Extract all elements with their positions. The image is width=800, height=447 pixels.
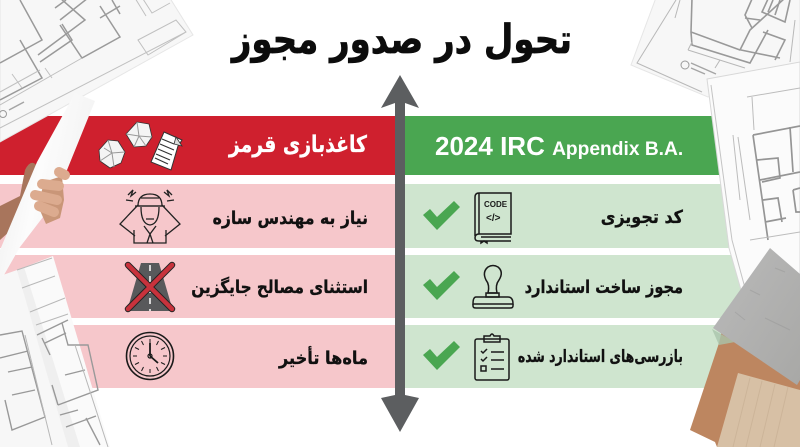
center double arrow xyxy=(381,75,419,432)
title: تحول در صدور مجوز xyxy=(230,16,572,63)
blueprint sheet right xyxy=(707,62,800,320)
icon: crossed road xyxy=(127,263,173,311)
icon: code book: </> xyxy=(486,213,501,224)
icon: checklist clipboard xyxy=(475,334,509,380)
right row 2 label: مجوز ساخت استاندارد xyxy=(525,277,683,297)
rolled blueprint bottom left xyxy=(0,256,110,447)
hand back and thumb xyxy=(0,163,38,240)
icon: green check 2 xyxy=(423,271,460,300)
right row backgrounds xyxy=(405,184,750,388)
icon: crumpled papers and document xyxy=(99,122,182,170)
left row backgrounds xyxy=(0,184,395,388)
icon: stressed engineer xyxy=(120,190,180,243)
paper roll xyxy=(0,93,95,282)
light wood sample xyxy=(717,373,800,447)
left row 2 label: استثنای مصالح جایگزین xyxy=(191,276,368,298)
right row 3 label: بازرسی‌های استاندارد شده xyxy=(518,346,683,367)
blueprint sheet top right xyxy=(631,0,800,97)
right row 1 label: کد تجویزی xyxy=(601,207,683,228)
left header bar xyxy=(0,116,395,175)
left panel: red paperwork rows xyxy=(0,116,395,388)
icon: code book: CODE xyxy=(484,200,508,209)
left row 1 label: نیاز به مهندس سازه xyxy=(213,207,368,229)
rolled blueprint and hand xyxy=(0,93,95,282)
left row 3 label: ماه‌ها تأخیر xyxy=(278,346,368,369)
blueprint sheet top left xyxy=(0,0,193,142)
stone sample xyxy=(713,248,800,385)
icon: rubber stamp xyxy=(473,266,513,308)
right header bar xyxy=(405,116,730,175)
right header text: 2024 IRC Appendix B.A. xyxy=(435,131,683,161)
right panel: green rows xyxy=(405,116,750,388)
icon: code book xyxy=(475,193,511,243)
icon: green check 3 xyxy=(423,341,460,370)
icon group: wood and stone samples xyxy=(690,248,800,447)
icon: green check 1 xyxy=(423,201,460,230)
icon: clock xyxy=(126,332,174,380)
left header text: کاغذبازی قرمز xyxy=(228,130,368,157)
fingers xyxy=(35,172,65,224)
wood sample xyxy=(690,330,800,447)
shadow under stone xyxy=(712,329,735,345)
